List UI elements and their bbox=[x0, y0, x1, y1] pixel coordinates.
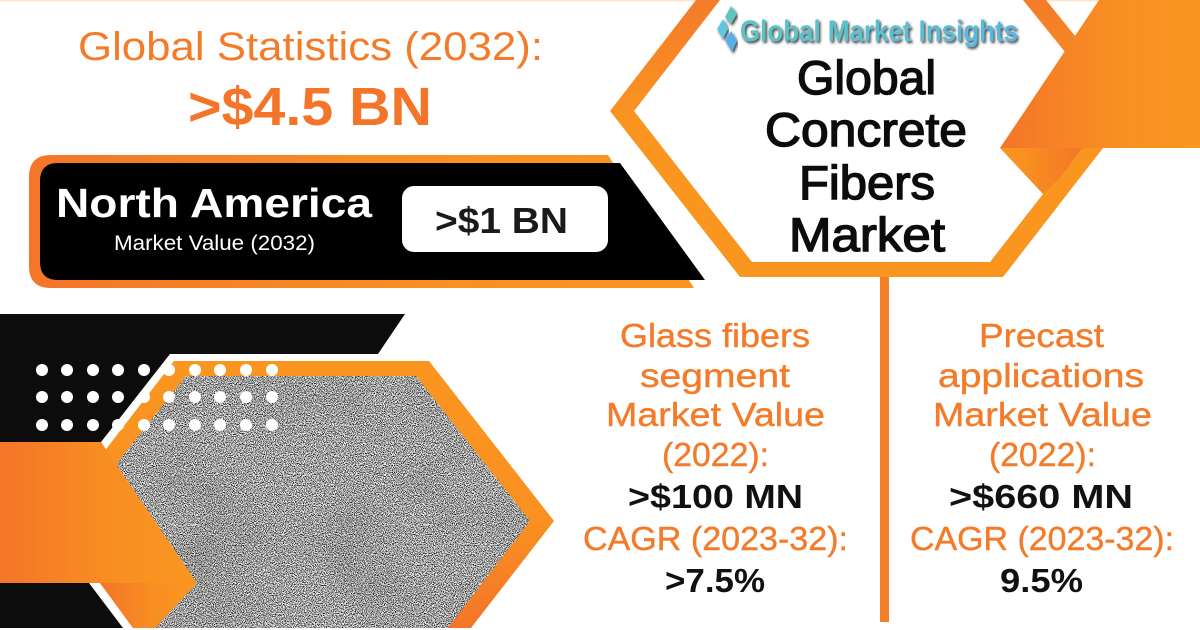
orange corner banner bbox=[1000, 0, 1200, 194]
global statistics heading: Global Statistics (2032): bbox=[78, 25, 543, 69]
panel: precast applications: applications bbox=[938, 357, 1144, 394]
panel: glass fibers segment: (2022): bbox=[662, 436, 769, 473]
panel: glass fibers segment bbox=[583, 317, 848, 599]
orange pentagon bbox=[0, 442, 197, 583]
value pill: >$1 BN bbox=[435, 200, 568, 241]
panel: precast applications: Precast bbox=[979, 317, 1104, 354]
black lower corner bbox=[0, 583, 123, 628]
title text: Fibers bbox=[799, 156, 935, 209]
panel: glass fibers segment: Glass fibers bbox=[620, 317, 810, 354]
center divider bbox=[880, 277, 889, 622]
panel: precast applications: >$660 MN bbox=[949, 478, 1133, 515]
logo: Global Market Insights bbox=[717, 6, 1018, 52]
value pill bbox=[402, 186, 608, 252]
concrete texture photo bbox=[116, 376, 530, 628]
region subtitle: Market Value (2032) bbox=[114, 232, 315, 255]
panel: photo and geometric shapes bbox=[0, 314, 554, 630]
panel: precast applications: 9.5% bbox=[1000, 562, 1083, 599]
panel: glass fibers segment: >$100 MN bbox=[628, 478, 803, 515]
panel: precast applications bbox=[910, 317, 1174, 599]
panel: North America bbox=[29, 155, 705, 288]
panel: glass fibers segment: CAGR (2023-32): bbox=[583, 520, 848, 557]
dot grid bbox=[36, 364, 278, 431]
title text: Concrete bbox=[765, 103, 967, 156]
title text: Market bbox=[789, 208, 945, 261]
panel: glass fibers segment: Market Value bbox=[606, 396, 825, 433]
region name: North America bbox=[56, 180, 373, 226]
panel: precast applications: Market Value bbox=[933, 396, 1152, 433]
global statistic value: >$4.5 BN bbox=[188, 77, 432, 137]
panel: precast applications: (2022): bbox=[989, 436, 1096, 473]
orange hexagon frame bbox=[100, 361, 554, 628]
orange lower triangle bbox=[100, 583, 197, 628]
panel: glass fibers segment: segment bbox=[640, 357, 790, 394]
top edge tint bbox=[0, 0, 1200, 2]
black band bbox=[0, 314, 405, 442]
logo: Global Market Insights: Global Market Insights bbox=[740, 15, 1018, 48]
title text: Global bbox=[797, 51, 936, 104]
main title hexagon bbox=[610, 0, 1120, 277]
panel: glass fibers segment: >7.5% bbox=[665, 562, 765, 599]
panel: precast applications: CAGR (2023-32): bbox=[910, 520, 1174, 557]
title text bbox=[765, 51, 967, 261]
